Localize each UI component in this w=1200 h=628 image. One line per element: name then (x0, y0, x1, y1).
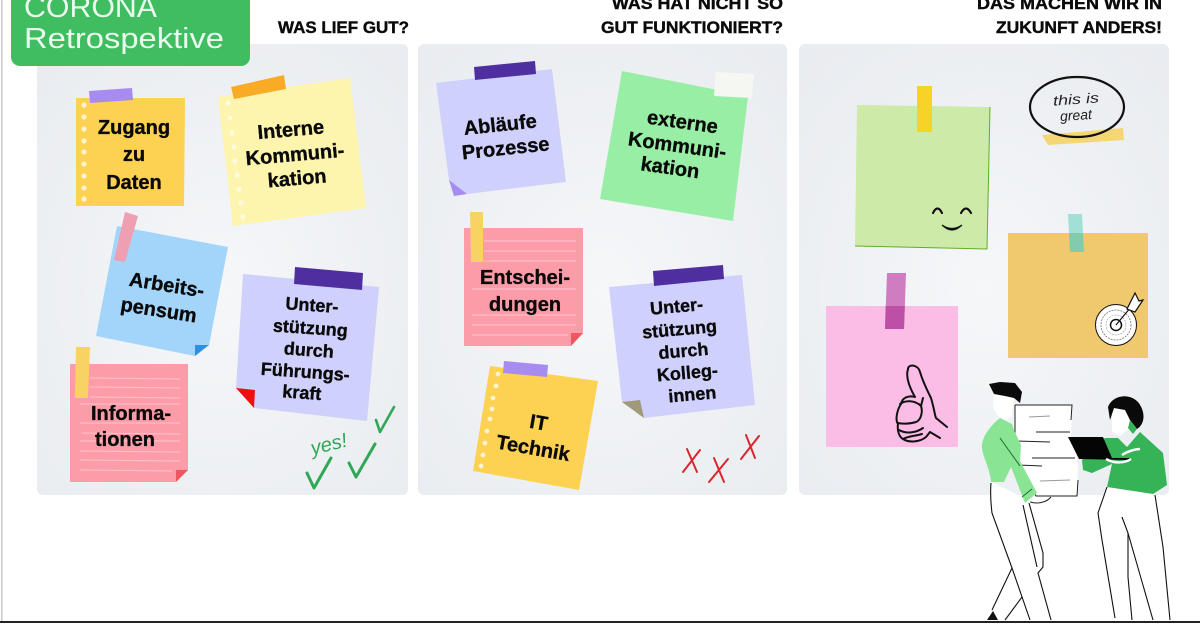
note: Interne Kommunikation (218, 75, 366, 226)
woman head (1108, 396, 1144, 436)
note: externe Kommunikation: kation (639, 153, 701, 183)
check marks with yes (306, 407, 394, 488)
woman torso (1082, 432, 1167, 494)
heading: was lief gut: WAS LIEF GUT? (278, 18, 409, 37)
note: externe Kommunikation (600, 71, 754, 221)
note: externe Kommunikation: Kommuni- (627, 128, 728, 164)
illustration: man carrying boxes (982, 382, 1078, 620)
note: green smiley (855, 86, 990, 249)
heading: das machen wir in zukunft anders (977, 0, 1162, 37)
check marks with yes: yes! (306, 430, 350, 460)
note: Entscheidungen (464, 212, 583, 346)
boxes (1015, 405, 1078, 496)
woman legs (1098, 486, 1170, 620)
this is great stamp (1030, 77, 1124, 145)
note: Interne Kommunikation: Interne (257, 116, 325, 144)
man legs (987, 482, 1051, 620)
note: Unterstützung durch Führungskraft: Unter- (285, 293, 339, 317)
note: Arbeitspensum (96, 212, 228, 356)
note: IT Technik: Technik (495, 431, 572, 466)
note: Entscheidungen: Entschei- (480, 267, 570, 289)
laptop (1068, 437, 1130, 460)
this is great stamp: this is (1052, 89, 1099, 109)
heading: das machen wir in zukunft anders: ZUKUNFT ANDERS! (996, 18, 1162, 37)
note: Unterstützung durch Kolleginnen (609, 265, 755, 418)
note: orange target (1008, 214, 1148, 358)
title banner: Retrospektive (24, 23, 224, 55)
note: IT Technik (473, 361, 598, 490)
note: Unterstützung durch Kolleginnen: Kolleg- (656, 360, 719, 385)
panel: das machen wir in zukunft anders (799, 44, 1169, 495)
illustration: woman with laptop (1068, 396, 1170, 620)
note: externe Kommunikation: externe (646, 107, 719, 138)
baseline (0, 621, 1200, 623)
note: Interne Kommunikation: Kommuni- (245, 140, 345, 170)
heading: was hat nicht so gut funktioniert: GUT FUNKTIONIERT? (601, 18, 783, 37)
note: Abläufe Prozesse: Abläufe (463, 110, 538, 140)
note: Entscheidungen: dungen (489, 294, 561, 316)
note: Informationen (70, 347, 188, 482)
note: Zugang zu Daten: Zugang (98, 117, 170, 139)
note: Zugang zu Daten: zu (123, 144, 145, 166)
note: Arbeitspensum: Arbeits- (128, 269, 206, 302)
note: Unterstützung durch Führungskraft: durch (283, 338, 335, 362)
panel: was lief gut (37, 44, 408, 495)
note: Unterstützung durch Führungskraft: Führungs- (260, 359, 350, 385)
man head (989, 382, 1022, 420)
note: Unterstützung durch Führungskraft: stützung (272, 316, 348, 341)
man torso (982, 418, 1037, 503)
heading: was hat nicht so gut funktioniert (601, 0, 783, 37)
hand under boxes (1030, 497, 1051, 503)
note: Unterstützung durch Kolleginnen: stützung (641, 316, 718, 342)
note: Unterstützung durch Führungskraft: kraft (282, 381, 322, 404)
red crosses (683, 435, 759, 482)
note: Abläufe Prozesse (436, 61, 566, 196)
note: Informationen: Informa- (91, 403, 171, 425)
note: Unterstützung durch Kolleginnen: innen (667, 382, 717, 406)
title banner (11, 0, 250, 66)
note: IT Technik: IT (528, 411, 549, 436)
note: Zugang zu Daten (76, 88, 185, 206)
panel: was hat nicht so gut funktioniert (418, 44, 787, 495)
note: Zugang zu Daten: Daten (106, 172, 162, 194)
woman hand (1106, 449, 1140, 462)
this is great stamp: great (1059, 106, 1094, 124)
note: Unterstützung durch Führungskraft (236, 267, 379, 421)
note: Informationen: tionen (95, 429, 155, 451)
note: Abläufe Prozesse: Prozesse (461, 133, 550, 164)
note: Interne Kommunikation: kation (267, 165, 327, 192)
note: pink thumbs up (826, 273, 958, 447)
note: Arbeitspensum: pensum (119, 294, 198, 328)
note: Unterstützung durch Kolleginnen: Unter- (649, 294, 704, 319)
note: Unterstützung durch Kolleginnen: durch (658, 339, 709, 363)
